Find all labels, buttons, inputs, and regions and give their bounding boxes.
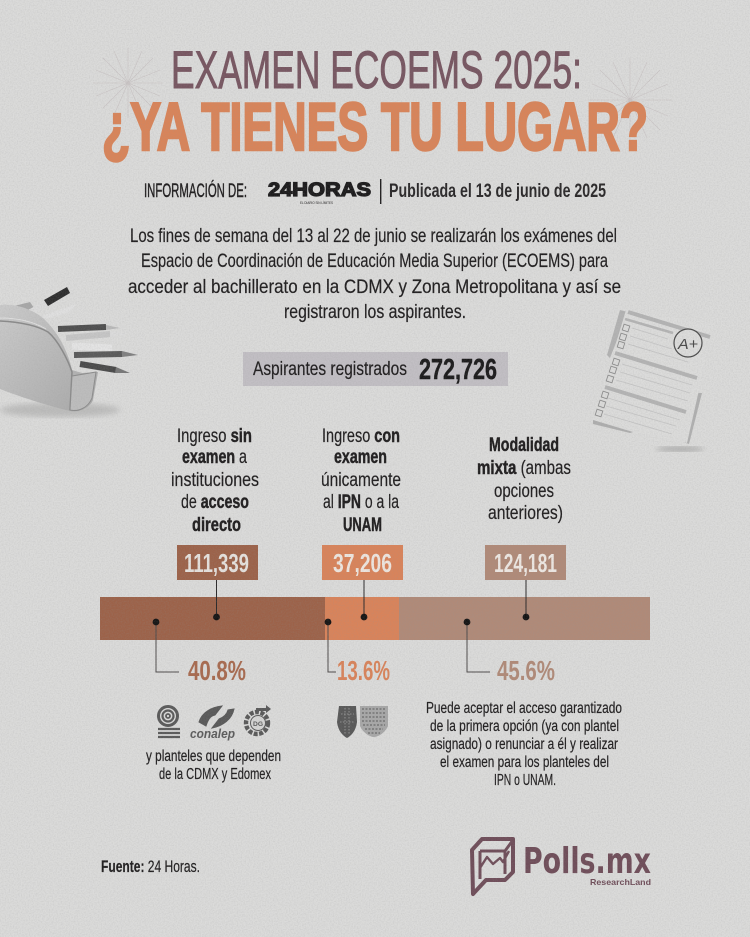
segment: 40.8% [100, 597, 325, 640]
column 2 heading: al IPN o a la [323, 492, 399, 513]
icon: conalep logo [190, 706, 235, 741]
column 3 heading: Modalidad [489, 435, 559, 456]
connectors [156, 580, 526, 672]
column 1 heading: instituciones [171, 470, 259, 491]
wordmark: Polls.mx [523, 841, 651, 882]
column 2 heading: UNAM [343, 515, 382, 536]
illustration: pencil case [0, 287, 138, 417]
value box: 111,339: 111,339 [184, 548, 249, 578]
value box: 124,181: 124,181 [494, 548, 557, 578]
column 3 heading: anteriores) [488, 503, 563, 524]
column 1 heading: examen a [182, 447, 247, 468]
column 1 heading [171, 426, 259, 536]
column 2 heading: Ingreso con [322, 426, 400, 447]
note: column 1: de la CDMX y Edomex [159, 766, 271, 783]
icon: chart speech bubble [472, 839, 513, 894]
note: column 3: el examen para los planteles del [440, 754, 609, 771]
icon: conalep logo: conalep [190, 727, 235, 741]
total value: 272,726 [419, 354, 497, 386]
note: column 3: IPN o UNAM. [494, 772, 556, 789]
stacked bar [100, 597, 650, 640]
column 3 heading: opciones [494, 481, 554, 502]
column 1 heading: directo [192, 515, 241, 536]
illustration: exam sheet: A+ [677, 336, 698, 353]
column 2 heading: únicamente [321, 470, 401, 491]
note: column 1: y planteles que dependen [146, 748, 281, 765]
logo: 24 Horas: EL DIARIO SIN LÍMITES [300, 200, 333, 205]
source note: Fuente: 24 Horas. [101, 857, 200, 876]
value box: 111,339 [177, 545, 258, 580]
intro paragraph: Los fines de semana del 13 al 22 de junio se realizarán los exámenes del [130, 226, 617, 247]
note: column 3 [426, 700, 622, 789]
percentage 40.8%: 40.8% [188, 655, 246, 686]
segment: 45.6% [399, 597, 650, 640]
column 2 heading: examen [334, 447, 387, 468]
icon: IPN shield [337, 706, 357, 738]
intro paragraph [128, 226, 621, 323]
value box: 37,206 [322, 545, 403, 580]
source label: INFORMACIÓN DE: [144, 180, 247, 202]
total label: Aspirantes registrados [253, 359, 407, 380]
icon: book spiral logo [158, 706, 180, 737]
column 3 heading [477, 435, 571, 524]
value box: 37,206: 37,206 [333, 548, 392, 578]
publication date: Publicada el 13 de junio de 2025 [389, 181, 606, 202]
note: column 3: de la primera opción (ya con plantel [430, 718, 619, 735]
segment: 13.6% [325, 597, 399, 640]
total registered panel [243, 352, 508, 386]
intro paragraph: registraron los aspirantes. [284, 302, 466, 323]
tagline: ResearchLand [590, 877, 651, 887]
column 1 heading: Ingreso sin [177, 426, 252, 447]
logo: 24 Horas: 24HORAS [268, 180, 371, 201]
column 2 heading [321, 426, 401, 536]
column 1 heading: de acceso [181, 492, 249, 513]
note: column 1 [146, 748, 281, 783]
value box: 124,181 [485, 545, 566, 580]
icon: gear logo: DG [253, 721, 263, 728]
note: column 3: asignado) o renunciar a él y realizar [430, 736, 618, 753]
icon: gear logo [246, 705, 271, 734]
intro paragraph: Espacio de Coordinación de Educación Media Superior (ECOEMS) para [141, 251, 608, 272]
illustration: exam sheet [593, 310, 714, 452]
icon: UNAM shield [360, 706, 388, 737]
column 3 heading: mixta (ambas [477, 458, 571, 479]
percentage 13.6%: 13.6% [337, 655, 390, 686]
percentage 45.6%: 45.6% [497, 655, 555, 686]
logo: Polls.mx [472, 839, 651, 894]
note: column 3: Puede aceptar el acceso garantizado [426, 700, 622, 717]
intro paragraph: acceder al bachillerato en la CDMX y Zona Metropolitana y así se [128, 277, 621, 298]
source line [144, 179, 606, 205]
